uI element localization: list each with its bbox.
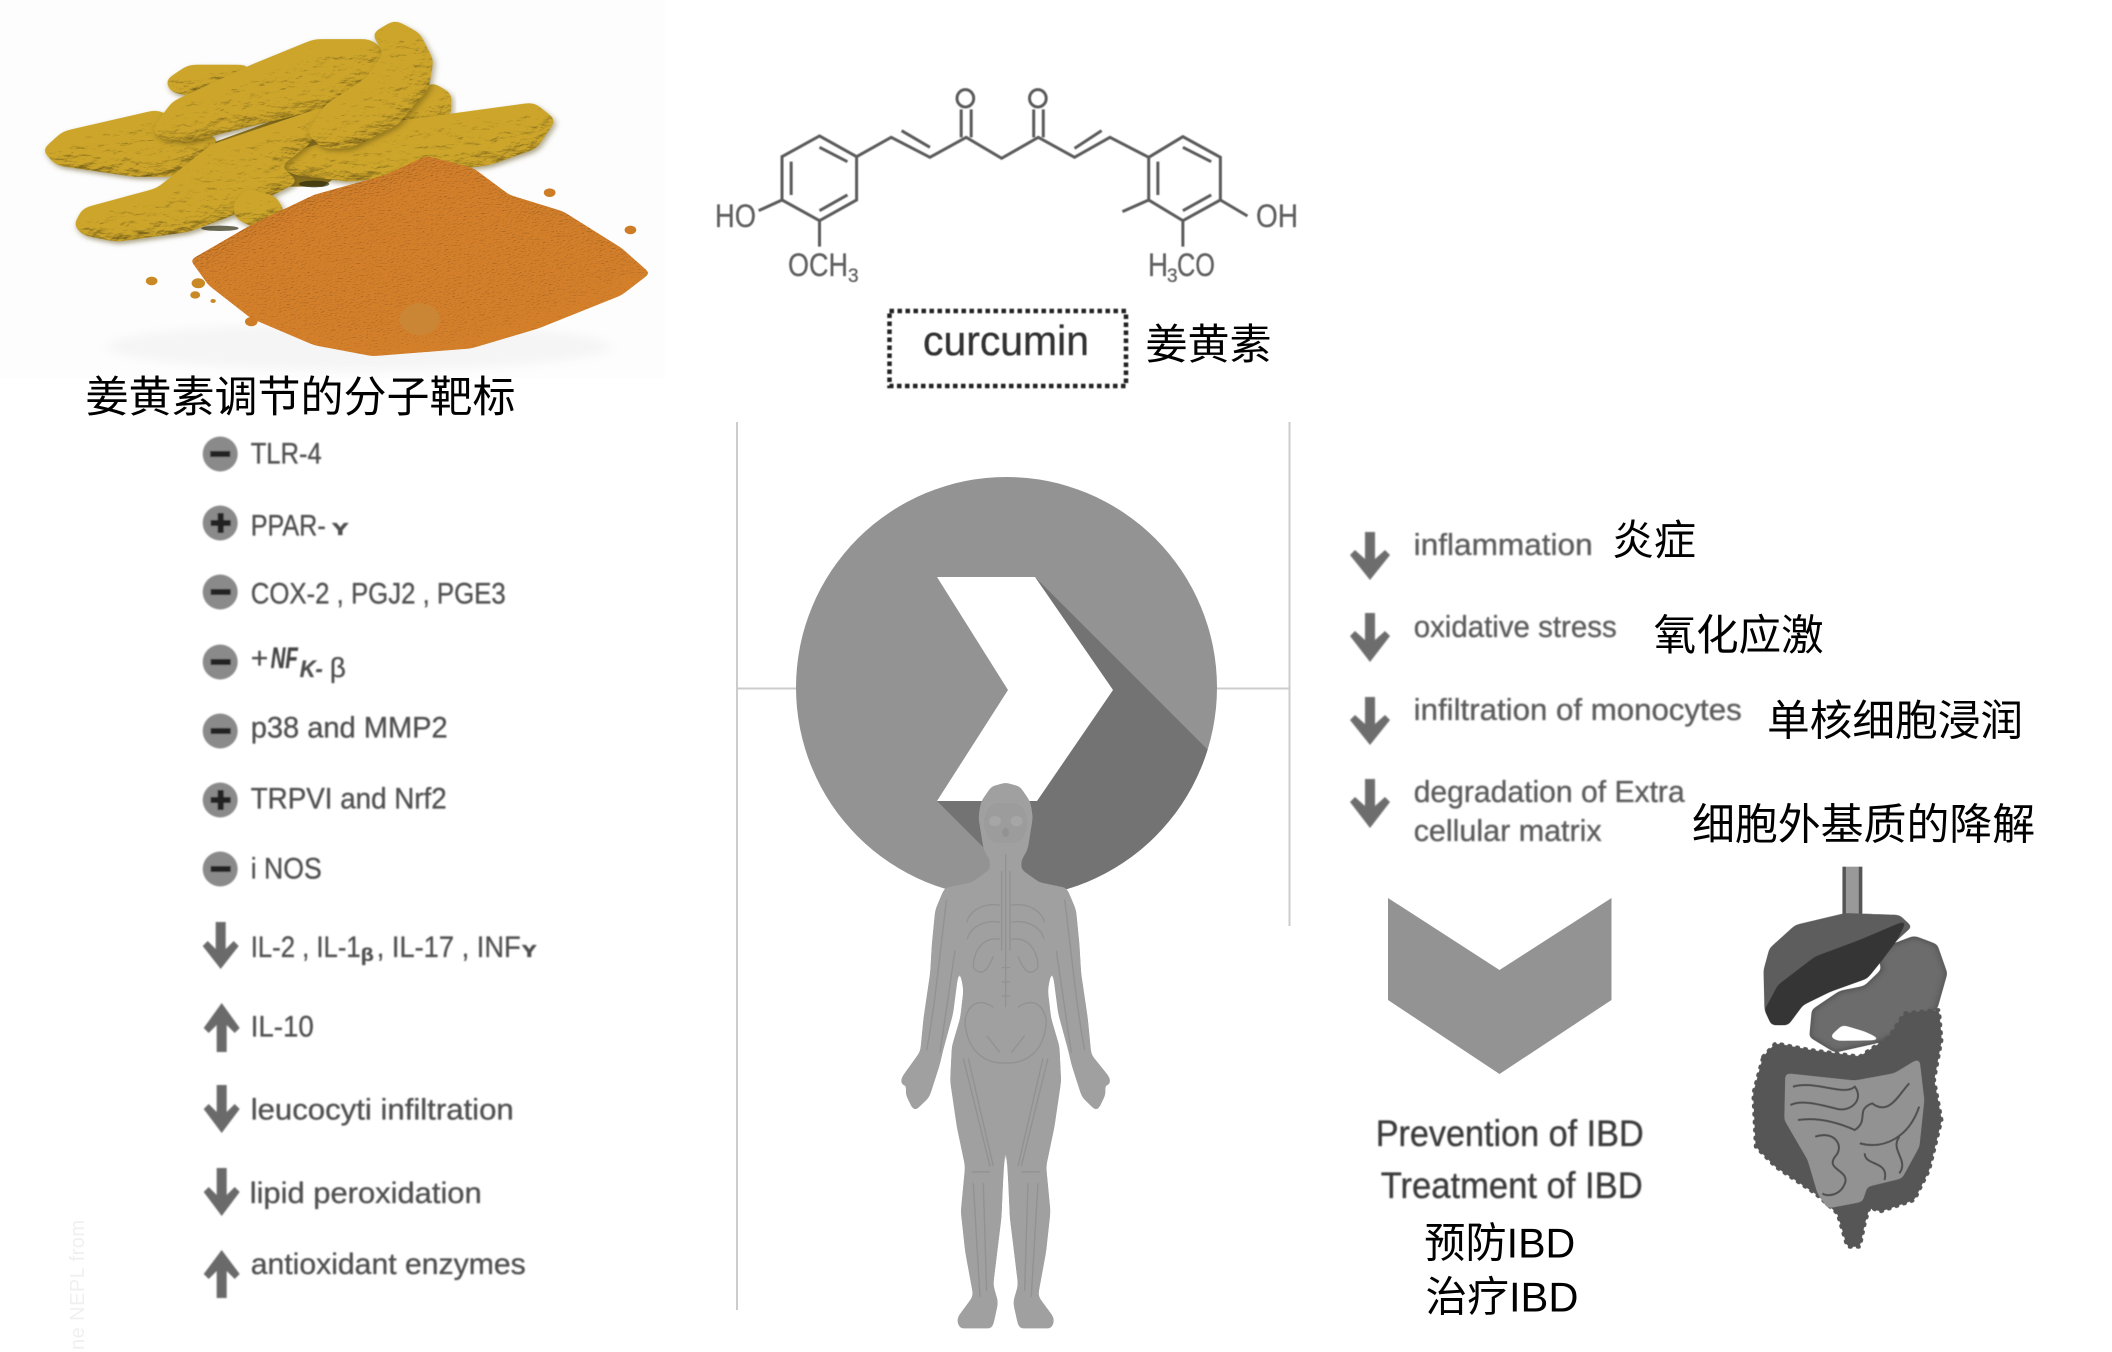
- curcumin molecule structure: HO: [715, 198, 756, 234]
- outcome chinese text: 治疗IBD: [1426, 1274, 1578, 1320]
- effect: oxidative stress: [1350, 609, 1824, 662]
- curcumin molecule structure: 3: [848, 266, 859, 287]
- row: interleukins down: ʏ: [522, 937, 537, 962]
- row: iNOS: i NOS: [251, 852, 322, 886]
- effect: infiltration of monocytes: [1350, 692, 2023, 746]
- row: PPAR-gamma: ʏ: [332, 515, 349, 540]
- row: TLR-4: TLR-4: [251, 438, 322, 470]
- row: NF-kB: K-: [300, 656, 323, 683]
- photo: turmeric roots and powder: [0, 0, 665, 378]
- effect: infiltration of monocytes: infiltration of monocytes: [1414, 692, 1742, 727]
- row: antioxidant enzymes up: [204, 1248, 526, 1298]
- row: interleukins down: β: [361, 945, 374, 965]
- right list: effects: [1350, 517, 2035, 850]
- effect: inflammation: [1350, 517, 1696, 580]
- row: COX-2, PGJ2, PGE3: [203, 574, 506, 610]
- faint source watermark: ne NEPL from: [67, 1220, 89, 1350]
- row: lipid peroxidation down: [204, 1168, 482, 1216]
- curcumin dashed label box: [890, 311, 1126, 386]
- outcome text: prevention and treatment: [1376, 1113, 1644, 1206]
- down chevron: [1388, 898, 1612, 1074]
- curcumin dashed label box: curcumin: [923, 317, 1089, 364]
- effect: infiltration of monocytes: 单核细胞浸润: [1767, 698, 2023, 746]
- effect: degradation of extracellular matrix: cellular matrix: [1414, 813, 1602, 848]
- curcumin molecule structure: OCH: [788, 247, 848, 283]
- row: TRPVI and Nrf2: TRPVI and Nrf2: [251, 782, 447, 816]
- row: interleukins down: [203, 922, 537, 969]
- row: COX-2, PGJ2, PGE3: COX-2 , PGJ2 , PGE3: [251, 578, 506, 610]
- row: interleukins down: IL-2 , IL-1: [251, 931, 361, 964]
- left list: molecular targets: [203, 436, 537, 1298]
- outcome text: prevention and treatment: Prevention of IBD: [1376, 1113, 1644, 1154]
- curcumin molecule structure: OH: [1256, 198, 1298, 234]
- row: IL-10 up: [204, 1003, 314, 1052]
- outcome chinese text: 预防IBD: [1424, 1220, 1575, 1266]
- effect: degradation of extracellular matrix: 细胞外基质的降解: [1692, 802, 2035, 850]
- row: TLR-4: [203, 436, 322, 472]
- effect: inflammation: inflammation: [1414, 527, 1593, 562]
- row: NF-kB: [203, 642, 346, 683]
- curcumin molecule structure: CO: [1177, 247, 1215, 283]
- effect: degradation of extracellular matrix: degradation of Extra: [1414, 774, 1685, 809]
- row: iNOS: [203, 852, 322, 886]
- effect: degradation of extracellular matrix: [1350, 774, 2035, 850]
- row: NF-kB: +: [251, 642, 268, 675]
- row: PPAR-gamma: [203, 506, 349, 542]
- center left and right rules: [737, 422, 1290, 1310]
- heading: molecular targets: 姜黄素调节的分子靶标: [86, 374, 516, 422]
- outcome text: prevention and treatment: Treatment of IBD: [1381, 1165, 1643, 1206]
- row: NF-kB: β: [330, 652, 346, 683]
- row: PPAR-gamma: PPAR-: [251, 510, 326, 542]
- digestive system illustration: [1753, 867, 1946, 1247]
- effect: oxidative stress: 氧化应激: [1654, 613, 1824, 660]
- row: leucocyte infiltration down: leucocyti infiltration: [251, 1094, 514, 1126]
- row: antioxidant enzymes up: antioxidant enzymes: [251, 1248, 526, 1281]
- curcumin molecule structure: [715, 90, 1298, 287]
- curcumin molecule structure: H: [1148, 247, 1168, 283]
- curcumin chinese label: 姜黄素: [1146, 321, 1272, 368]
- curcumin molecule structure: 3: [1167, 266, 1178, 287]
- row: interleukins down: , IL-17 , INF: [377, 931, 521, 964]
- row: p38 and MMP2: p38 and MMP2: [251, 712, 448, 744]
- effect: inflammation: 炎症: [1612, 517, 1696, 564]
- outcome chinese text: [1424, 1220, 1578, 1320]
- row: IL-10 up: IL-10: [251, 1010, 314, 1044]
- row: lipid peroxidation down: lipid peroxidation: [250, 1177, 482, 1210]
- human body with skeleton: [903, 786, 1108, 1325]
- row: leucocyte infiltration down: [204, 1085, 514, 1133]
- effect: oxidative stress: oxidative stress: [1414, 609, 1617, 644]
- row: NF-kB: NF: [271, 642, 298, 675]
- center circle with chevron: [796, 477, 1217, 890]
